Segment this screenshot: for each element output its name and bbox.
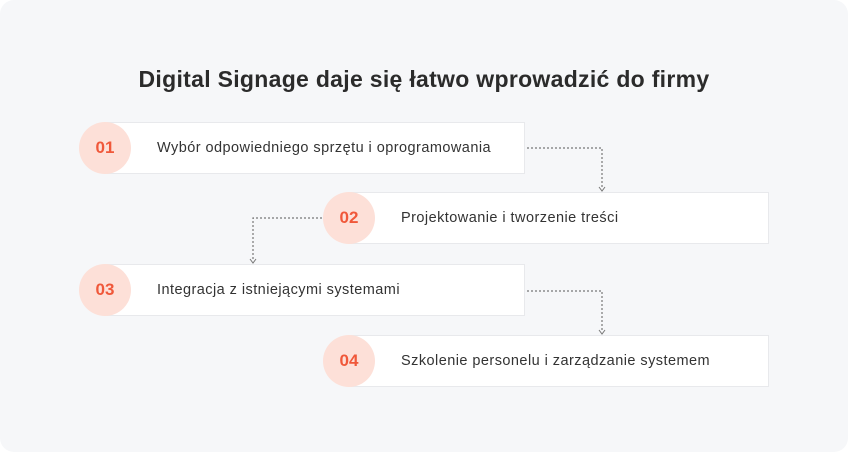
- step 01: [79, 122, 525, 174]
- step 04: Szkolenie personelu i zarządzanie systemem: [401, 353, 710, 369]
- step 01: 01: [96, 138, 114, 157]
- step 04: 04: [340, 351, 358, 370]
- step 04: [323, 335, 769, 387]
- step 02: [323, 192, 769, 244]
- step 02: 02: [340, 208, 358, 227]
- step 03: [79, 264, 525, 316]
- step 03: 03: [96, 280, 114, 299]
- step 01: Wybór odpowiedniego sprzętu i oprogramowania: [157, 140, 491, 156]
- title: Digital Signage daje się łatwo wprowadzić do firmy: [139, 66, 709, 92]
- step 02: Projektowanie i tworzenie treści: [401, 210, 618, 226]
- step 03: Integracja z istniejącymi systemami: [157, 282, 400, 298]
